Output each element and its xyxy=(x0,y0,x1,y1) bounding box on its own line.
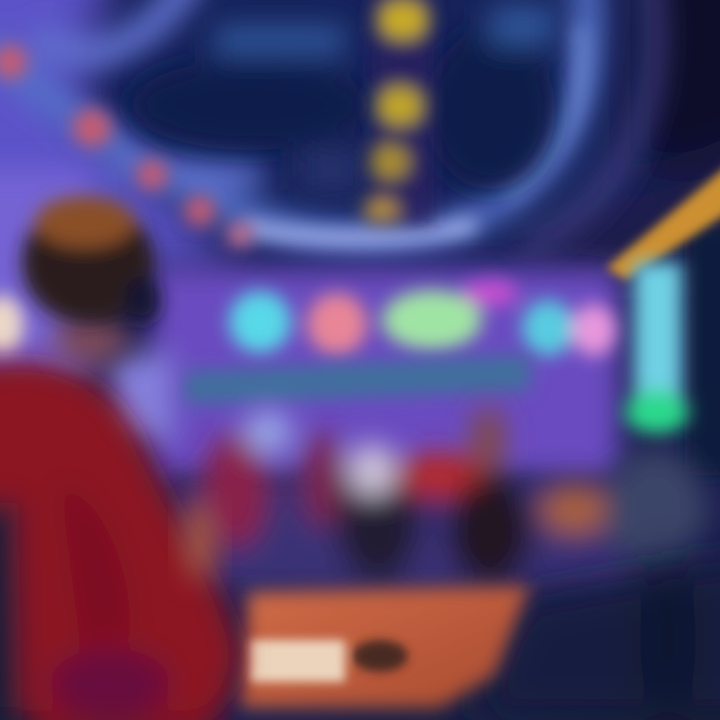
wall: row of coloured screens xyxy=(229,280,616,356)
foreground person: head with brown hair xyxy=(22,196,160,324)
ceiling: bright base of the ring xyxy=(250,30,582,238)
ceiling: curved light ring xyxy=(0,0,654,245)
right side: dark panel xyxy=(685,225,720,475)
wall: teal counter strip xyxy=(185,355,530,404)
table: white paper and dark object xyxy=(250,640,408,682)
ceiling: dark navy vault and purple left side xyxy=(0,0,720,280)
ceiling: column of yellow lights xyxy=(363,0,434,225)
foreground: dark lower right figures xyxy=(470,550,720,720)
audience: seated people in the mid-ground xyxy=(170,406,705,590)
right side: glowing cyan column xyxy=(625,262,689,434)
table: orange tabletop xyxy=(240,585,530,708)
right side: orange beam xyxy=(606,155,720,280)
ceiling: pink spot lights xyxy=(0,45,253,248)
foreground person: red sweater xyxy=(0,362,240,720)
ceiling: dark panels inside the ring xyxy=(130,5,555,190)
foreground: bottom edge colour band xyxy=(0,680,720,720)
foreground person: arm highlight xyxy=(184,500,216,580)
foreground person: left edge glow xyxy=(0,295,24,355)
wall: purple back wall xyxy=(0,170,620,478)
foreground person: neck xyxy=(52,314,128,366)
